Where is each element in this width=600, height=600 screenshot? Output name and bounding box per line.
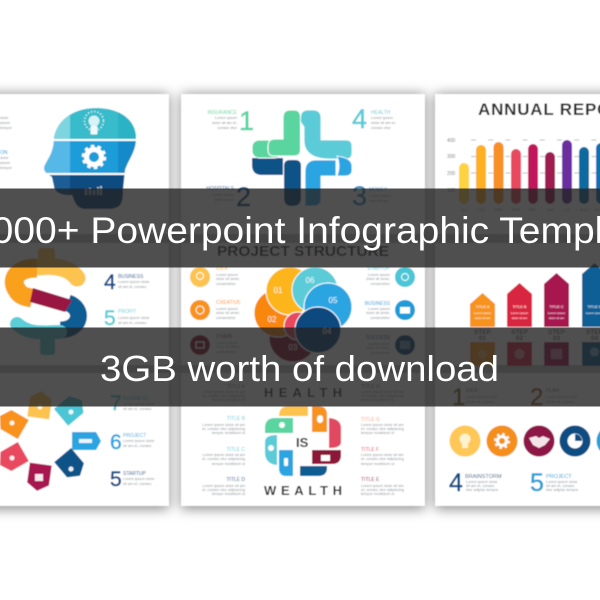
tag: navy xyxy=(54,448,88,483)
right items xyxy=(365,266,415,355)
right items: dolor sit amet, xyxy=(366,311,390,315)
arrow: step 01: dolor sit am xyxy=(475,316,491,320)
right titles: TITLE E xyxy=(361,477,380,483)
arrow: step 03: Lorem ipsum xyxy=(548,311,566,315)
month labels: APR xyxy=(512,208,520,212)
cross: blue arm xyxy=(305,156,352,206)
pinwheel numbers: 02 xyxy=(268,315,277,324)
tag icons xyxy=(10,404,92,481)
label: brainstorm: sit am et, consec xyxy=(466,484,495,488)
cross: teal arm xyxy=(300,110,352,159)
label: seven: 7 xyxy=(110,392,122,415)
arrow: step 02: TITLE B xyxy=(513,305,527,309)
heading: health: HEALTH xyxy=(264,385,342,400)
label: profit: 5 xyxy=(104,307,116,330)
step labels: STEP xyxy=(548,329,566,336)
left titles: tempor incididunt ut xyxy=(212,398,246,402)
axis labels: 400 xyxy=(447,138,456,144)
month labels: AUG xyxy=(580,208,588,212)
step labels: 01 xyxy=(479,335,486,342)
left titles: TITLE A xyxy=(227,384,246,390)
left titles: TITLE B xyxy=(227,416,246,422)
label: research: Lorem ipsum xyxy=(369,194,391,198)
left items: CREATIVE xyxy=(216,300,241,306)
step labels: STEP xyxy=(511,329,529,336)
label: profit xyxy=(104,307,150,330)
label: hospitals xyxy=(206,182,251,212)
head side labels: tempor xyxy=(0,166,13,170)
left titles: et, consec etur adipiscing xyxy=(202,427,245,431)
left titles: Lorem ipsum dolor sit am xyxy=(202,423,245,427)
cross: navy arm xyxy=(252,158,301,206)
right items: Lorem ipsum xyxy=(368,307,390,311)
month labels: FEB xyxy=(477,208,485,212)
right titles: TITLE F xyxy=(361,447,379,453)
label: brainstorm: etur adipisc tempor xyxy=(466,488,499,492)
pinwheel numbers: 05 xyxy=(329,296,338,305)
label: research xyxy=(352,181,391,211)
tag: maroon xyxy=(26,463,52,492)
ring: blue xyxy=(279,450,293,476)
label: startup: Lorem ipsum dolor xyxy=(123,477,155,481)
label: startup: STARTUP xyxy=(123,471,147,477)
right items: consectetur xyxy=(370,316,391,320)
month labels: JAN xyxy=(460,208,468,212)
label: project five: etur adipisc tempor xyxy=(546,488,579,492)
ring: orange xyxy=(312,406,327,432)
right titles: TITLE G xyxy=(361,417,380,423)
right items: STARTUP xyxy=(367,266,391,272)
head side labels: tempor xyxy=(0,126,13,130)
left items: Lorem ipsum xyxy=(216,341,238,345)
ring: navy xyxy=(300,466,327,476)
left titles: Lorem ipsum dolor sit am xyxy=(202,390,245,394)
month labels xyxy=(460,208,600,212)
pinwheel numbers: 04 xyxy=(323,327,332,336)
ring: yellow xyxy=(279,406,308,416)
month labels: MAR xyxy=(494,208,503,212)
right items: consectetur xyxy=(370,282,391,286)
label: seven: sit am et, consec xyxy=(123,407,152,411)
right items: dolor sit amet, xyxy=(366,346,390,350)
right items: Lorem ipsum xyxy=(368,273,390,277)
dollar: bottom stub xyxy=(40,335,55,355)
bars xyxy=(459,140,600,204)
left titles: Lorem ipsum dolor sit am xyxy=(202,453,245,457)
left items: dolor sit amet, xyxy=(216,345,240,349)
dark banner: bottom xyxy=(0,328,600,406)
icon: gear xyxy=(83,146,105,168)
head silhouette xyxy=(40,105,140,211)
arrow: step 04 xyxy=(582,263,600,327)
head side labels: ON xyxy=(0,150,8,156)
step labels xyxy=(474,329,600,342)
label: startup xyxy=(110,468,155,491)
right titles: tempor incididunt ut xyxy=(361,492,395,496)
dollar: maroon bar xyxy=(30,288,72,312)
month labels: JUL xyxy=(564,208,570,212)
dark banner: top xyxy=(0,188,600,268)
left titles: tempor incididunt ut xyxy=(212,492,246,496)
left items: consectetur xyxy=(216,282,236,286)
label: research: 3 xyxy=(352,181,367,211)
right items: BUSINESS xyxy=(365,301,391,307)
left titles: Lorem ipsum dolor sit am xyxy=(202,484,245,488)
circle icons row xyxy=(450,426,600,456)
head side labels: ipsum xyxy=(0,161,10,165)
panel: circle steps xyxy=(449,384,600,497)
panel: medical cross xyxy=(206,104,396,212)
heading: wealth: WEALTH xyxy=(264,483,342,498)
label: seven xyxy=(110,392,155,415)
label: project five: sit am et, consec xyxy=(546,484,575,488)
label: plan: PLAN xyxy=(546,388,559,394)
left items: IDEA xyxy=(216,266,228,272)
month labels: JUN xyxy=(546,208,554,212)
label: brainstorm: Lorem ipsum dolor xyxy=(466,480,498,484)
panel: step arrows xyxy=(470,263,600,366)
tag: teal xyxy=(54,392,89,426)
right items: consectetur xyxy=(370,351,391,355)
label: brainstorm: BRAINSTORM xyxy=(465,474,502,480)
arrow: step 02: Lorem ipsum xyxy=(511,311,529,315)
label: health xyxy=(352,104,396,134)
ring: teal xyxy=(265,435,277,465)
step icon squares xyxy=(470,342,600,366)
label: plan: sit am et, consec xyxy=(546,400,575,404)
left titles: tempor incididunt ut xyxy=(212,462,246,466)
label: insurance: dolor sit am et, xyxy=(212,121,237,125)
label: project: Lorem ipsum dolor xyxy=(123,439,155,443)
cross: green arm xyxy=(252,110,300,158)
right titles: Lorem ipsum dolor sit am xyxy=(361,390,404,394)
pinwheel chart xyxy=(254,267,352,362)
right titles xyxy=(361,384,404,496)
right items: Lorem ipsum xyxy=(368,342,390,346)
label: hospitals: dolor sit am xyxy=(214,198,234,202)
label: profit: PROFIT xyxy=(118,309,136,315)
tag: red xyxy=(0,442,29,475)
left titles: et, consec etur adipiscing xyxy=(202,488,245,492)
label: hospitals: 2 xyxy=(236,182,251,212)
tag: blue xyxy=(72,432,101,450)
label: hospitals: Lorem ipsum xyxy=(212,193,234,197)
grid dashes xyxy=(471,140,600,190)
label: insurance: Lorem ipsum xyxy=(215,116,237,120)
pinwheel numbers: 03 xyxy=(289,343,298,352)
panel: health is wealth xyxy=(202,384,404,498)
label: insurance: INSURANCE xyxy=(208,110,238,116)
step labels: 02 xyxy=(516,335,523,342)
right titles: et, consec etur adipiscing xyxy=(361,394,404,398)
icon: bar chart xyxy=(85,186,102,195)
arrow: step 03 xyxy=(544,273,569,327)
month labels: MAY xyxy=(529,208,537,212)
label: project: sit am et, consec xyxy=(123,444,152,448)
label: research: dolor sit am xyxy=(369,199,389,203)
label: project: PROJECT xyxy=(123,433,146,439)
right items: dolor sit amet, xyxy=(366,277,390,281)
right titles: et, consec etur adipiscing xyxy=(361,457,404,461)
label: project five xyxy=(530,469,579,497)
ring icons xyxy=(268,415,330,466)
arrow: step 02: dolor sit am xyxy=(512,316,528,320)
left items: Lorem ipsum xyxy=(216,273,238,277)
label: business xyxy=(104,271,150,294)
label: plan xyxy=(530,384,578,411)
left items: dolor sit amet, xyxy=(216,277,240,281)
step labels: 04 xyxy=(591,335,598,342)
word: is: IS xyxy=(296,435,309,450)
right titles: tempor incididunt ut xyxy=(361,431,395,435)
tag: yellow xyxy=(27,390,53,419)
panel: dollar sign xyxy=(14,248,150,355)
label: research: MONEY xyxy=(369,187,388,193)
panel: tag ring xyxy=(0,390,155,492)
label: health: Lorem ipsum xyxy=(371,116,393,120)
head side labels: dolor xyxy=(0,116,9,120)
label: business: Lorem ipsum dolor xyxy=(118,280,150,284)
head side labels: ipsum xyxy=(0,121,10,125)
dollar: yellow arc xyxy=(40,266,77,278)
label: project: 6 xyxy=(110,431,122,454)
left items: dolor sit amet, xyxy=(216,311,240,315)
label: profit: Lorem ipsum dolor xyxy=(118,316,150,320)
label: brainstorm xyxy=(449,469,502,497)
left items: Lorem ipsum xyxy=(216,307,238,311)
axis labels: 200 xyxy=(447,171,456,177)
right titles: Lorem ipsum dolor sit am xyxy=(361,484,404,488)
label: business: 4 xyxy=(104,271,116,294)
pinwheel numbers xyxy=(268,276,338,352)
panel: project structure xyxy=(190,243,415,362)
left titles: TITLE C xyxy=(226,447,245,453)
tag: orange xyxy=(0,406,29,439)
label: profit: sit am et, consec xyxy=(118,321,147,325)
label: plan: Lorem ipsum dolor xyxy=(546,395,578,399)
axis labels: 100 xyxy=(447,188,456,194)
label: health: dolor sit am et, xyxy=(371,121,396,125)
left items: consectetur xyxy=(216,350,236,354)
right titles: Lorem ipsum dolor sit am xyxy=(361,423,404,427)
label: idea: 1 xyxy=(452,384,465,411)
dollar: teal arc xyxy=(17,324,60,332)
label: plan: 2 xyxy=(530,384,543,411)
left items: consectetur xyxy=(216,316,236,320)
ring: maroon xyxy=(312,450,341,464)
right titles: tempor incididunt ut xyxy=(361,398,395,402)
arrow: step 03: dolor sit am xyxy=(549,316,565,320)
pinwheel numbers: 06 xyxy=(306,276,315,285)
label: business: BUSINESS xyxy=(118,274,144,280)
right titles: et, consec etur adipiscing xyxy=(361,488,404,492)
label: health: HEALTH xyxy=(371,110,391,116)
label: health: consec etur xyxy=(371,126,391,130)
right titles: et, consec etur adipiscing xyxy=(361,427,404,431)
right titles: tempor incididunt ut xyxy=(361,462,395,466)
label: idea: sit am et, consec xyxy=(466,400,495,404)
left titles: et, consec etur adipiscing xyxy=(202,394,245,398)
banner subheading: 3GB worth of download xyxy=(100,348,499,389)
right items: SUCCESS xyxy=(366,335,391,341)
panel: head infographic xyxy=(0,105,140,211)
axis labels xyxy=(447,138,456,194)
label: idea: IDEA xyxy=(466,388,478,394)
left titles: TITLE D xyxy=(226,477,245,483)
arrow: step 01: TITLE A xyxy=(476,305,490,309)
head side labels xyxy=(0,116,13,170)
label: business: sit am et, consec xyxy=(118,285,147,289)
label: project xyxy=(110,431,155,454)
axis labels: 300 xyxy=(447,154,456,160)
step labels: 03 xyxy=(553,335,560,342)
label: health: 4 xyxy=(352,104,367,134)
label: hospitals: HOSPITALS xyxy=(206,186,235,192)
label: insurance: consec etur xyxy=(217,126,238,130)
label: project five: Lorem ipsum dolor xyxy=(546,480,578,484)
template cards xyxy=(0,94,600,506)
icon: light bulb xyxy=(84,112,104,134)
label: seven: BUSINESS xyxy=(123,396,149,402)
arrow: step 01: Lorem ipsum xyxy=(474,311,492,315)
right titles: Lorem ipsum dolor sit am xyxy=(361,453,404,457)
step labels: STEP xyxy=(474,329,492,336)
panel: annual report bar chart xyxy=(447,100,600,212)
arrow: step 03: TITLE C xyxy=(549,305,564,309)
pinwheel numbers: 01 xyxy=(274,286,283,295)
heading: PROJECT STRUCTURE xyxy=(217,243,389,260)
label: insurance xyxy=(208,106,254,136)
label: seven: Lorem ipsum dolor xyxy=(123,402,155,406)
dollar: blue arc xyxy=(60,303,78,330)
left titles xyxy=(202,384,246,496)
left items: CHAIN xyxy=(216,334,232,340)
head side labels: dolor xyxy=(0,156,9,160)
label: idea: Lorem ipsum dolor xyxy=(466,395,498,399)
arrow: step 02 xyxy=(507,283,532,327)
label: insurance: 1 xyxy=(239,106,254,136)
dollar: orange arc xyxy=(14,268,37,298)
ring: green xyxy=(265,418,293,433)
ring: red xyxy=(329,418,341,448)
label: brainstorm: 4 xyxy=(449,469,463,497)
label: startup: sit am et, consec xyxy=(123,482,152,486)
label: project five: PROJECT xyxy=(546,474,572,480)
label: project five: 5 xyxy=(530,469,544,497)
dollar: top stub xyxy=(38,248,55,270)
label: idea xyxy=(452,384,498,411)
label: startup: 5 xyxy=(110,468,122,491)
right titles: TITLE H xyxy=(361,384,380,390)
arrow: step 01 xyxy=(470,293,495,327)
left items xyxy=(190,266,241,355)
card shadows xyxy=(0,94,600,509)
left titles: tempor incididunt ut xyxy=(212,431,246,435)
left titles: et, consec etur adipiscing xyxy=(202,457,245,461)
